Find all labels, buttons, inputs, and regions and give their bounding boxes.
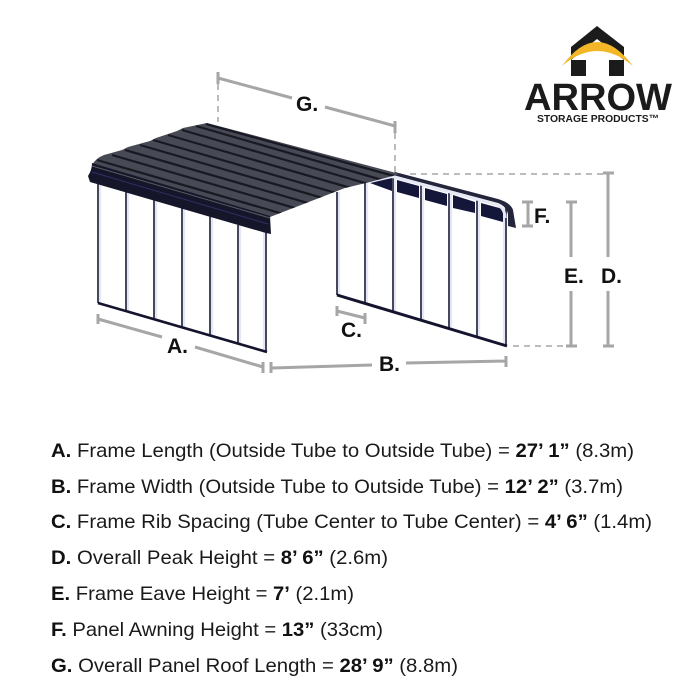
right wall sill [337, 295, 507, 346]
dimension A [98, 314, 263, 373]
logo wordmark: ARROW [524, 77, 672, 119]
right wall ribs [337, 178, 506, 346]
dimension A: A. [167, 335, 188, 358]
dimension B: B. [379, 353, 400, 376]
spec B: B. Frame Width (Outside Tube to Outside Tube) = 12’ 2” (3.7m) [51, 476, 623, 498]
spec F: F. Panel Awning Height = 13” (33cm) [51, 619, 383, 641]
logo gold arc [562, 42, 633, 66]
dimension E [564, 202, 584, 346]
logo tagline: STORAGE PRODUCTS™ [537, 113, 659, 125]
spec A: A. Frame Length (Outside Tube to Outside Tube) = 27’ 1” (8.3m) [51, 440, 634, 462]
dimension F: F. [534, 205, 550, 228]
dimension G: G. [296, 93, 318, 116]
spec C: C. Frame Rib Spacing (Tube Center to Tube Center) = 4’ 6” (1.4m) [51, 511, 652, 533]
carport illustration [88, 123, 516, 352]
dimension C: C. [341, 319, 362, 342]
roof ribs [96, 123, 396, 214]
dimension D: D. [601, 265, 622, 288]
dimension E: E. [564, 265, 584, 288]
dimension G [218, 72, 395, 172]
far roof edge [393, 172, 516, 228]
logo house roof [571, 26, 624, 60]
left wall ribs [98, 184, 266, 352]
specification list [51, 440, 652, 677]
spec G: G. Overall Panel Roof Length = 28’ 9” (8.8m) [51, 655, 458, 677]
dimension C [337, 306, 365, 342]
dimension B [271, 353, 506, 376]
dimension F [522, 202, 550, 228]
far awning panels [370, 178, 503, 222]
peak height guide [410, 173, 603, 175]
dimension D [601, 173, 622, 346]
spec D: D. Overall Peak Height = 8’ 6” (2.6m) [51, 547, 388, 569]
logo: Arrow Storage Products [524, 26, 672, 125]
front eave awning [88, 163, 271, 234]
left wall sill [98, 303, 267, 352]
roof surface [92, 123, 400, 217]
spec E: E. Frame Eave Height = 7’ (2.1m) [51, 583, 354, 605]
far rafter [368, 177, 505, 218]
logo house walls [571, 60, 624, 76]
base guide [513, 345, 565, 347]
